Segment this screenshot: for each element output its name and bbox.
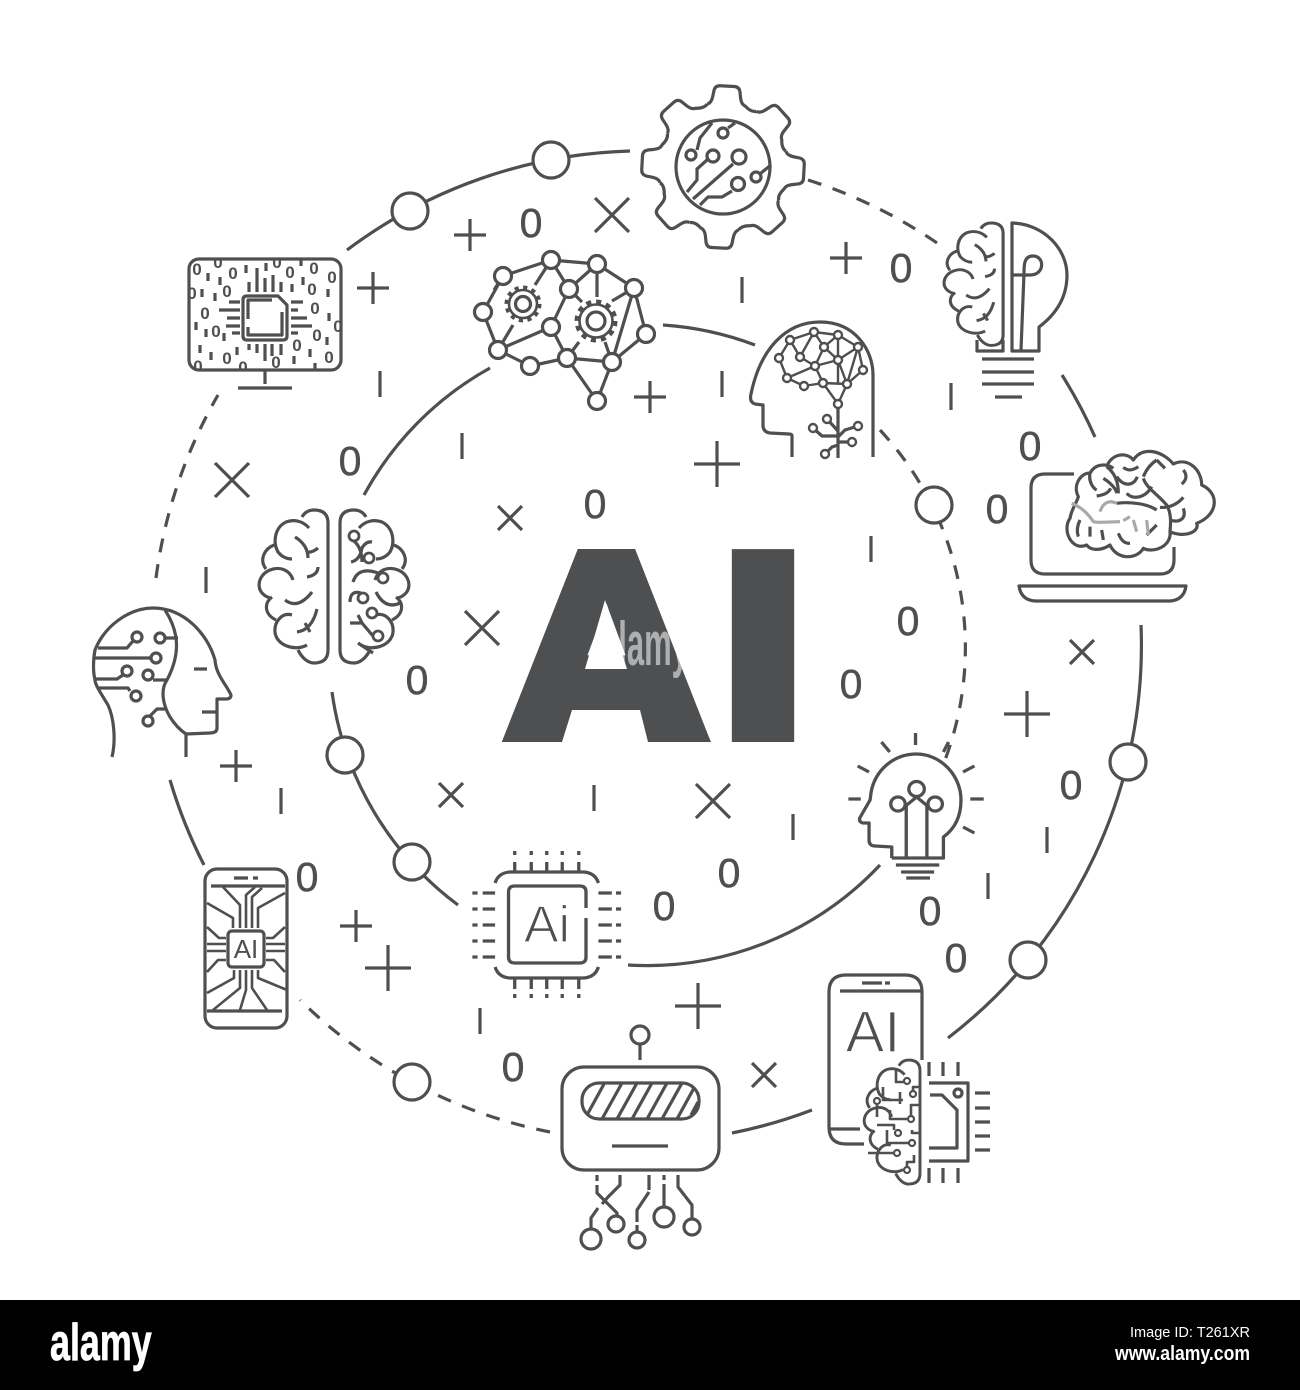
monitor binary digits: 0 [310,299,320,318]
monitor binary digits: 0 [238,358,248,377]
central title: AI [502,499,809,793]
monitor binary digits: 0 [327,268,337,287]
footer bar [0,1300,1300,1390]
monitor binary digits: 0 [228,264,238,283]
monitor binary digits: 0 [324,348,334,367]
footer image id: Image ID: T261XR [1130,1324,1250,1341]
monitor binary digits: 0 [285,263,295,282]
icon: monitor with chip and binary [189,258,341,388]
binary zeros: 0 [1060,762,1082,808]
monitor binary digits: 0 [312,326,322,345]
icon: half brain half light bulb [944,223,1067,397]
binary zeros: 0 [919,888,941,934]
binary zeros: 0 [406,657,428,703]
binary zeros: 0 [1019,423,1041,469]
icon: brain half organic half circuit [259,510,409,663]
monitor binary digits: 0 [200,304,210,323]
outer ring with nodes [156,142,1146,1133]
icon: head with neural network and branch [750,322,873,458]
monitor binary digits: 0 [187,284,197,303]
binary zeros: 0 [502,1044,524,1090]
icon: phone with circuit brain and chip [829,975,990,1184]
monitor binary digits: 0 [292,336,302,355]
monitor binary digits: 0 [211,322,221,341]
monitor binary digits: 0 [333,317,343,336]
central title: AI: A [504,499,709,793]
icon: head with circuit brain [94,608,231,757]
monitor binary digits: 0 [193,357,203,376]
binary zeros: 0 [718,850,740,896]
monitor binary digits: 0 [213,253,223,272]
monitor binary digits: 0 [222,282,232,301]
watermark over title: alamy [601,611,689,679]
cross signs [215,198,1094,1087]
footer website: www.alamy.com [1114,1343,1250,1365]
binary ones [206,277,1047,1034]
monitor binary digits: 0 [192,260,202,279]
binary zeros: 0 [945,935,967,981]
binary zeros: 0 [840,661,862,707]
icon: gear with circuit [641,85,805,249]
icon: AI processor chip [472,851,621,998]
inner ring with nodes [327,325,965,966]
central title: AI: I [717,499,809,793]
phone AI label: AI [846,1000,900,1065]
monitor binary digits: 0 [271,353,281,372]
binary zeros: 0 [296,854,318,900]
footer logo: alamy: alamy [50,1315,152,1372]
monitor binary digits: 0 [222,349,232,368]
phone chip label: AI [234,934,258,964]
binary zeros: 0 [986,486,1008,532]
binary zeros: 0 [653,883,675,929]
chip label: Ai [524,896,570,954]
monitor binary digits: 0 [272,253,282,272]
binary zeros: 0 [339,438,361,484]
binary zeros: 0 [890,245,912,291]
monitor binary digits [190,260,340,368]
icon: head shaped light bulb with rays [848,733,984,878]
binary zeros: 0 [897,598,919,644]
icon: neural network brain with gears [474,252,654,410]
icon: phone with AI chip circuit [205,869,287,1028]
monitor binary digits: 0 [309,259,319,278]
binary zeros: 0 [584,481,606,527]
icon: robot head with circuit wires [562,1026,719,1249]
icon: laptop with brain [1019,451,1214,601]
plus signs [220,219,1050,1029]
monitor binary digits: 0 [307,280,317,299]
binary zeros: 0 [520,200,542,246]
binary zeros [296,200,1082,1090]
